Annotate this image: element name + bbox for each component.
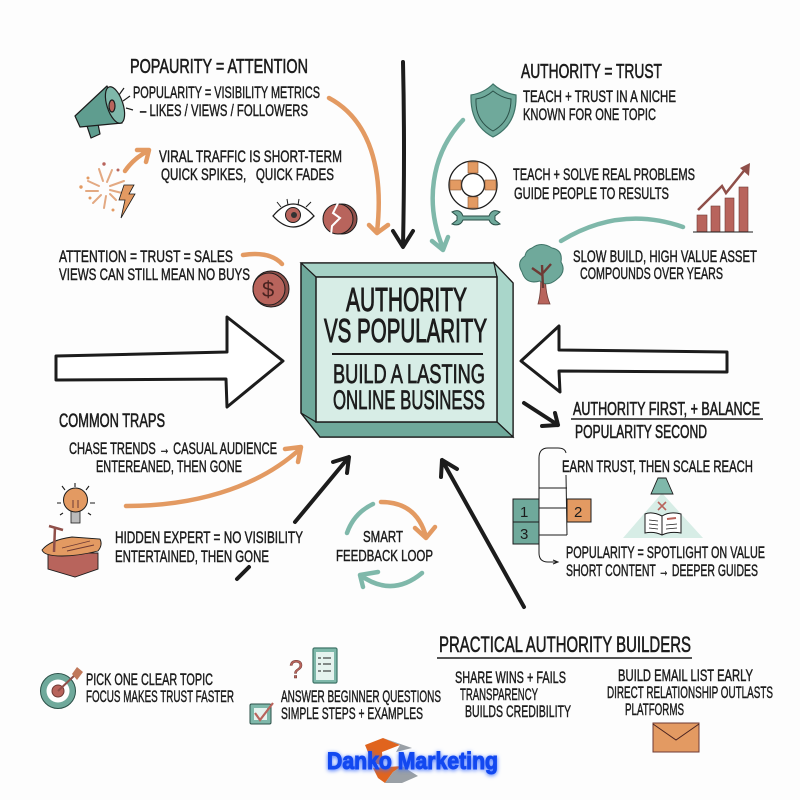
popularity metrics text (133, 84, 320, 120)
numbered framework diagram: 2 (574, 504, 582, 521)
numbered framework diagram (513, 448, 591, 564)
icon: dollar coin (253, 271, 289, 307)
answer questions text: SIMPLE STEPS + EXAMPLES (281, 705, 423, 723)
solve problems text: TEACH + SOLVE REAL PROBLEMS (513, 166, 695, 184)
logo: Danko Marketing (327, 738, 498, 783)
icon: question mark: ? (289, 656, 303, 684)
popularity metrics text: – LIKES / VIEWS / FOLLOWERS (140, 102, 308, 120)
icon: shield (471, 84, 516, 137)
icon: cracked coin (323, 203, 357, 235)
hidden expert text (115, 529, 303, 566)
icon: lightbulb (57, 483, 95, 523)
central 3D box (301, 263, 513, 437)
hidden expert text: ENTERTAINED, THEN GONE (115, 548, 269, 566)
hidden expert text: HIDDEN EXPERT = NO VISIBILITY (115, 529, 303, 547)
icon: dollar coin: $ (262, 277, 274, 302)
viral traffic text: QUICK SPIKES, QUICK FADES (161, 165, 334, 184)
arrow: trap to box black (295, 457, 349, 522)
share wins text: TRANSPARENCY (460, 686, 538, 704)
numbered framework diagram: 3 (520, 526, 528, 543)
central 3D box: BUILD A LASTING (333, 359, 485, 389)
arrow: left hollow (56, 317, 283, 407)
authority heading: AUTHORITY = TRUST (521, 61, 662, 83)
solve problems text (513, 166, 695, 203)
icon: fireworks and bolt (79, 162, 135, 218)
attention trust sales text: VIEWS CAN STILL MEAN NO BUYS (59, 266, 250, 284)
spotlight text (566, 544, 765, 580)
orange arc: attention to coin (243, 254, 282, 264)
solve problems text: GUIDE PEOPLE TO RESULTS (514, 185, 669, 203)
icon: eye (273, 199, 314, 227)
email list text: PLATFORMS (625, 701, 684, 719)
smart feedback loop (336, 502, 435, 587)
share wins text: SHARE WINS + FAILS (455, 669, 566, 687)
icon: checkbox (250, 703, 273, 724)
authority description: TEACH + TRUST IN A NICHE (523, 88, 676, 106)
arrow: short black stroke (237, 567, 249, 579)
icon: podium (42, 526, 101, 577)
smart feedback loop: FEEDBACK LOOP (336, 548, 433, 565)
pick one topic text (86, 671, 234, 706)
authority description: KNOWN FOR ONE TOPIC (523, 106, 656, 124)
icon: spotlight on book (623, 478, 703, 538)
central 3D box: ONLINE BUSINESS (333, 385, 485, 415)
orange arrow: popularity to box (329, 98, 388, 233)
central 3D box: AUTHORITY (346, 281, 467, 318)
share wins text (455, 669, 571, 721)
slow build text (573, 248, 757, 283)
arrow: lower right black (524, 403, 558, 426)
teal arc: tree to chart (561, 219, 683, 241)
orange arrow: traps to box (126, 447, 301, 506)
attention trust sales text: ATTENTION = TRUST = SALES (59, 248, 233, 266)
authority first heading: POPULARITY SECOND (575, 422, 707, 442)
answer questions text (281, 688, 441, 723)
central 3D box: VS POPULARITY (324, 312, 487, 349)
chase trends text: CHASE TRENDS → CASUAL AUDIENCE (69, 440, 277, 458)
chase trends text: ENTEREANED, THEN GONE (96, 458, 242, 476)
icon: target (40, 667, 83, 708)
share wins text: BUILDS CREDIBILITY (465, 703, 571, 721)
viral traffic text: VIRAL TRAFFIC IS SHORT-TERM (159, 147, 342, 166)
answer questions text: ANSWER BEGINNER QUESTIONS (281, 688, 441, 706)
email list text (607, 667, 773, 719)
icon: wrench (452, 211, 500, 225)
popularity metrics text: POPULARITY = VISIBILITY METRICS (133, 84, 320, 102)
authority description (523, 88, 676, 124)
teal arrow: authority to box (432, 120, 463, 250)
icon: growth bar chart (693, 163, 753, 232)
icon: lifebuoy (449, 161, 497, 209)
chase trends text (69, 440, 277, 476)
arrow: builders to box black (441, 460, 524, 607)
popularity heading: POPAURITY = ATTENTION (130, 56, 308, 78)
attention trust sales text (59, 248, 250, 284)
icon: tree (520, 244, 563, 304)
pick one topic text: PICK ONE CLEAR TOPIC (86, 671, 213, 689)
viral traffic text (159, 147, 342, 184)
authority first heading (571, 399, 763, 442)
arrow: right hollow (521, 326, 727, 392)
icon: clipboard checklist (313, 648, 337, 683)
numbered framework diagram: 1 (520, 504, 528, 521)
arrow: top vertical black (393, 62, 413, 247)
slow build text: COMPOUNDS OVER YEARS (580, 265, 723, 283)
logo: Danko Marketing: Danko Marketing (327, 748, 498, 775)
practical authority builders heading: PRACTICAL AUTHORITY BUILDERS (439, 632, 691, 657)
common traps heading: COMMON TRAPS (59, 411, 165, 432)
icon: megaphone (75, 84, 133, 138)
orange arrow: viral spike (125, 150, 149, 171)
smart feedback loop: SMART (363, 529, 403, 546)
pick one topic text: FOCUS MAKES TRUST FASTER (86, 688, 234, 706)
icon: envelope (653, 723, 699, 752)
